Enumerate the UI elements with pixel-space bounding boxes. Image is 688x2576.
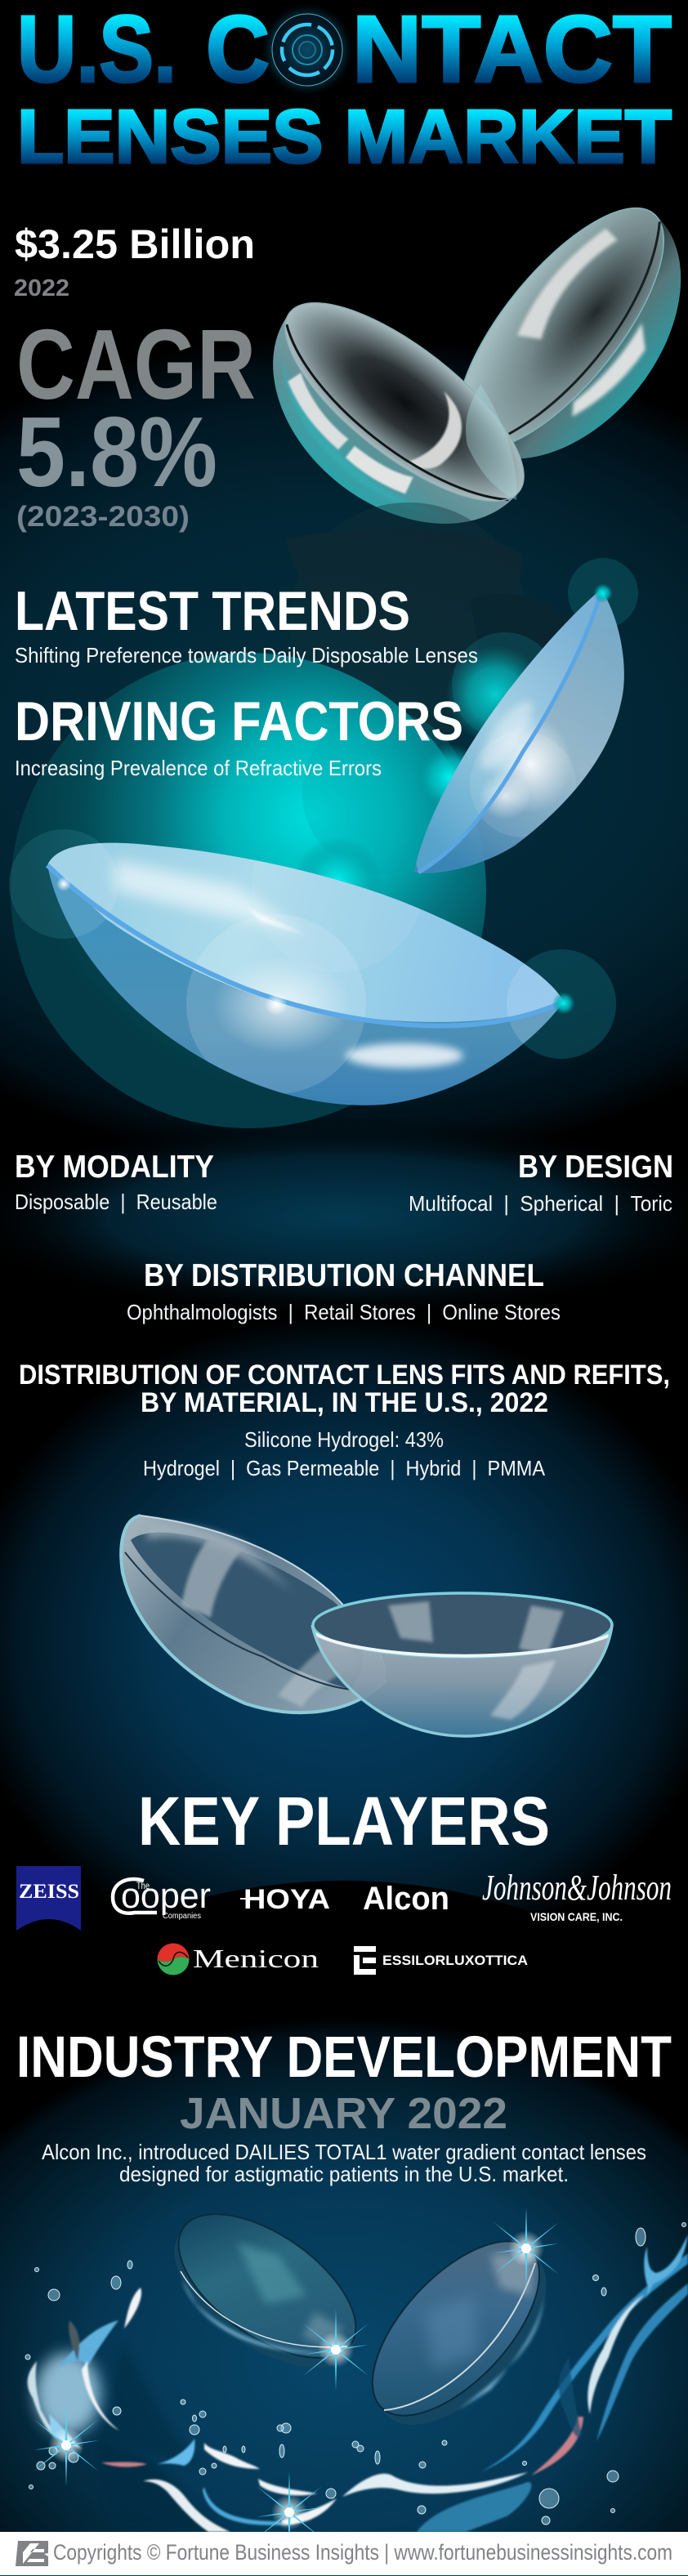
CAGR figure: (2023-2030) — [16, 501, 190, 533]
market size: 2022 — [14, 275, 69, 301]
section: industry development: designed for astigmatic patients in the U.S. market. — [119, 2162, 569, 2186]
logo: Alcon: Alcon — [363, 1881, 449, 1917]
section: by design: Multifocal | Spherical | Toric — [409, 1191, 672, 1216]
section: latest trends — [15, 580, 478, 667]
title line: LENSES MARKET: LENSES MARKET — [17, 94, 672, 179]
section: by design: BY DESIGN — [518, 1150, 673, 1185]
section: latest trends: LATEST TRENDS — [15, 580, 410, 642]
logo: Hoya: HOYA — [243, 1884, 330, 1915]
lens: left — [226, 270, 552, 574]
sparkle — [303, 2309, 369, 2391]
heading: key players: KEY PLAYERS — [138, 1783, 550, 1859]
section: material distribution — [19, 1359, 670, 1480]
lens: right — [423, 177, 688, 505]
panel: glowing blue lens background — [9, 502, 638, 1128]
logo: Johnson & Johnson — [482, 1868, 672, 1923]
water: right streams — [480, 2234, 688, 2476]
CAGR figure — [16, 309, 256, 533]
title line: U.S. CONTACT — [17, 0, 672, 102]
reflection ghost — [286, 502, 606, 739]
illustration: glass lens pair — [121, 1516, 612, 1736]
market size — [14, 221, 255, 301]
icon: eye lens in title — [268, 11, 346, 89]
lens: right bowl — [312, 1593, 612, 1736]
title — [17, 0, 672, 179]
section: by distribution channel: BY DISTRIBUTION CHANNEL — [144, 1258, 544, 1293]
section: by distribution channel — [127, 1258, 561, 1324]
lens: left floating — [149, 2186, 382, 2397]
logo: EssilorLuxottica — [354, 1946, 528, 1975]
logo: EssilorLuxottica: ESSILORLUXOTTICA — [382, 1953, 528, 1968]
logo: Menicon: Menicon — [193, 1944, 319, 1973]
sparkle — [257, 2471, 322, 2553]
water: bottom streams — [101, 2439, 531, 2532]
logo: Zeiss — [16, 1866, 81, 1931]
CAGR figure: 5.8% — [16, 396, 217, 507]
section: by design — [409, 1150, 673, 1216]
section: material distribution: Silicone Hydrogel: 43% — [244, 1427, 444, 1452]
illustration: lenses in water splash — [25, 2186, 688, 2553]
logo: The Cooper Companies: Companies — [163, 1912, 201, 1921]
dark water shadow — [96, 2345, 237, 2532]
section: material distribution: Hydrogel | Gas Permeable | Hybrid | PMMA — [143, 1456, 546, 1480]
section: latest trends: Shifting Preference towards Daily Disposable Lenses — [15, 643, 478, 667]
logo: The Cooper Companies: The — [136, 1880, 150, 1891]
section: industry development: JANUARY 2022 — [180, 2089, 507, 2138]
logo: Zeiss: ZEISS — [19, 1881, 79, 1903]
section: driving factors — [15, 690, 463, 780]
section: by modality: Disposable | Reusable — [15, 1190, 217, 1214]
lens: lower blue — [9, 583, 616, 1111]
water: left splash — [28, 2288, 141, 2449]
logo: Menicon — [157, 1943, 319, 1976]
sparkle — [34, 2404, 99, 2486]
section: by modality: BY MODALITY — [15, 1150, 214, 1185]
lens: upper blue — [409, 580, 624, 873]
section: driving factors: Increasing Prevalence of Refractive Errors — [15, 756, 382, 780]
section: by modality — [15, 1150, 217, 1214]
bokeh circles — [9, 558, 638, 1059]
lens: right floating — [343, 2208, 576, 2454]
CAGR figure: CAGR — [16, 309, 256, 420]
sparkle — [494, 2208, 559, 2289]
market size: $3.25 Billion — [15, 221, 255, 267]
lens: left bowl — [121, 1516, 386, 1712]
section: driving factors: DRIVING FACTORS — [15, 690, 463, 752]
illustration: grey contact lenses at top — [226, 177, 688, 574]
section: material distribution: BY MATERIAL, IN THE U.S., 2022 — [141, 1387, 548, 1418]
footer — [0, 2532, 688, 2576]
section: industry development: Alcon Inc., introduced DAILIES TOTAL1 water gradient contact lenses — [42, 2140, 646, 2164]
icon: Fortune Business Insights logo — [16, 2541, 48, 2566]
section: industry development — [16, 2025, 672, 2186]
logo: Johnson & Johnson: VISION CARE, INC. — [530, 1910, 623, 1923]
section: by distribution channel: Ophthalmologists | Retail Stores | Online Stores — [127, 1300, 561, 1324]
lens overlap — [466, 384, 516, 500]
logo: The Cooper Companies: ooper — [121, 1876, 211, 1916]
droplets — [25, 2222, 686, 2525]
